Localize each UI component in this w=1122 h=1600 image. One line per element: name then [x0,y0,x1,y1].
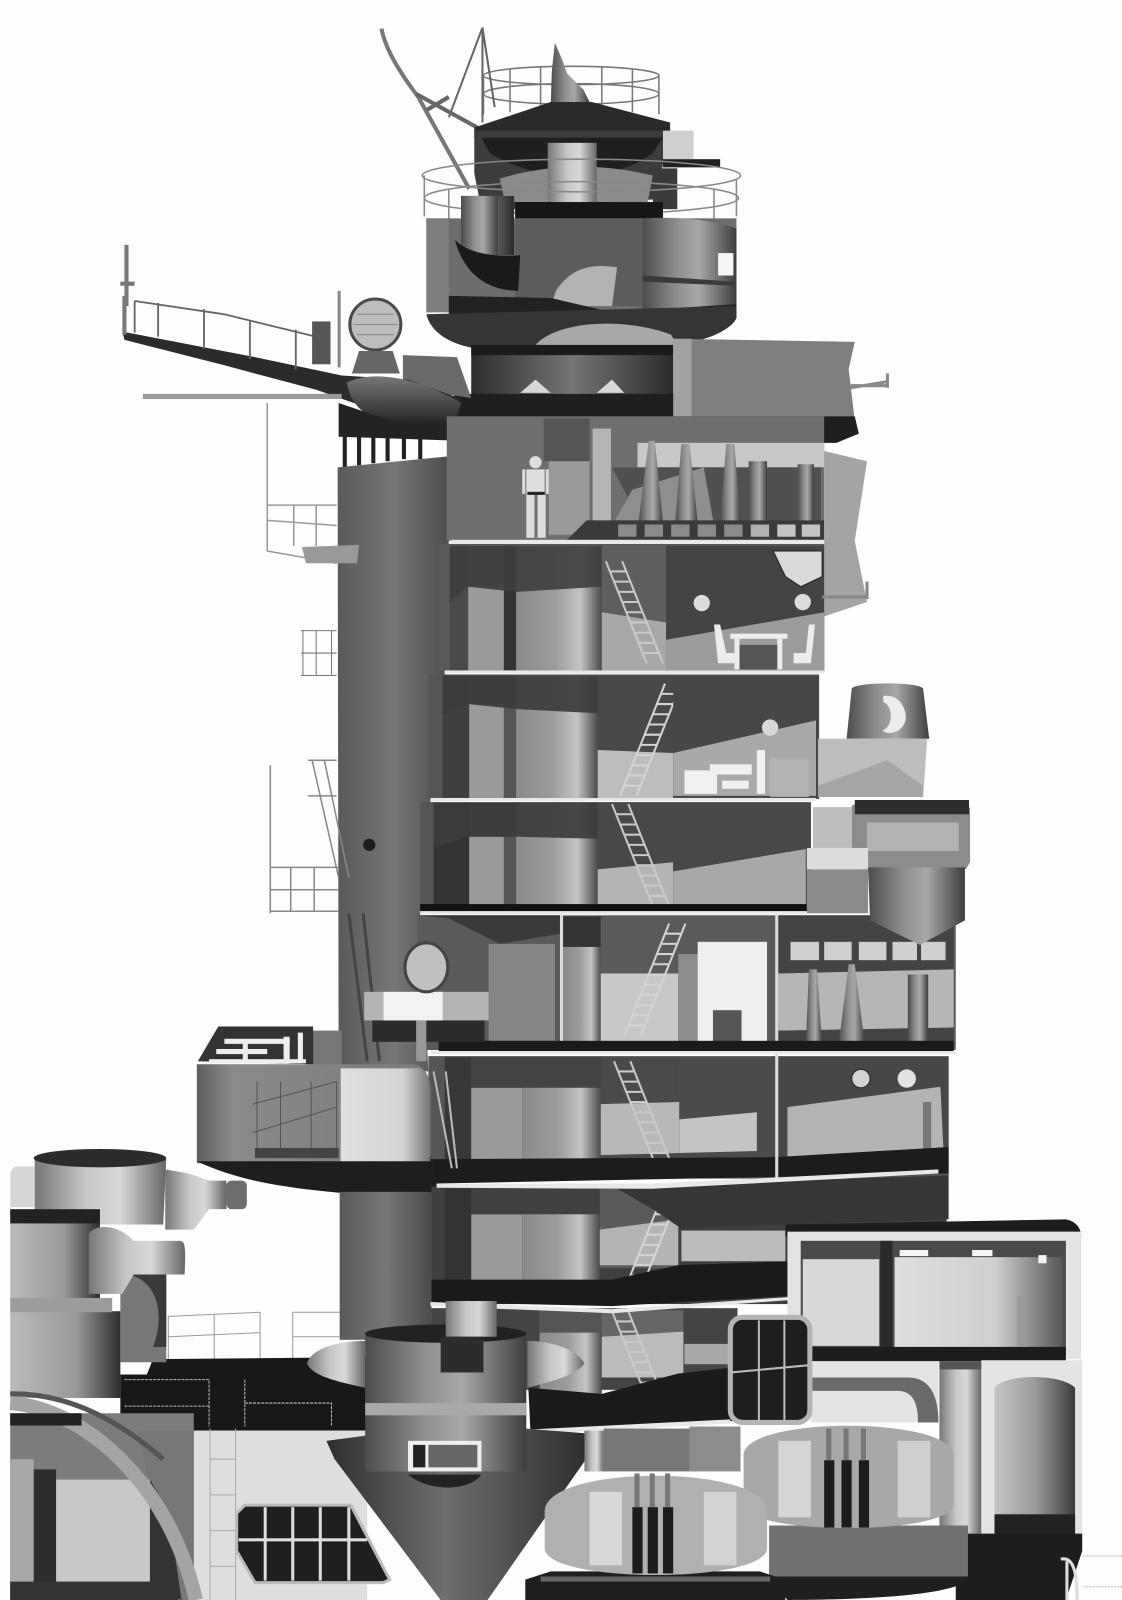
balcony wall [197,1064,430,1163]
central turret with cone [307,1301,590,1600]
wing supports [345,437,420,467]
white deck line group [420,540,957,1441]
rear side right pod [165,1169,226,1230]
hanging rail [267,403,337,563]
rear deck and rails at left [120,1312,367,1431]
searchlight [350,299,401,373]
light fittings [900,1250,1047,1263]
stair well [602,546,666,670]
searchlight [405,943,448,992]
arch band [10,1403,196,1600]
arch backing [10,1413,194,1600]
right room [778,915,954,1048]
upper cabin bowl [474,131,670,209]
box underside [454,394,859,443]
rear gun house [744,1426,968,1600]
tall side column [270,456,451,1071]
underside of deck above [612,1176,949,1229]
left pipes [450,546,468,670]
dotted ring [365,1403,526,1415]
dark column [34,1469,56,1600]
right compartment box [673,339,855,420]
tower neck [471,347,673,396]
bowl base [426,306,736,349]
dome [545,1476,767,1575]
section: deck 2 [439,544,867,671]
upper back wall [306,1031,342,1065]
stair cylinder [598,803,673,908]
box below hood [818,739,927,797]
far wedge [824,451,867,616]
floor shadow [439,1041,954,1051]
lower central trunk [584,1427,741,1471]
front barbette top [10,1209,100,1223]
dark band [449,296,736,318]
top dark slab [785,1219,1081,1237]
dark collar [515,202,663,220]
roof spike [551,43,590,104]
stair [434,1071,457,1168]
white arm [811,1361,938,1422]
hull window grid [237,1505,390,1583]
balcony platform [197,1027,457,1194]
dome [744,1426,954,1528]
column bracket [302,545,359,563]
section: deck 6 [428,1054,949,1184]
lit panel [50,1480,150,1582]
underside [197,1161,439,1194]
stair cylinder [600,1189,678,1268]
white frame [787,1232,1081,1359]
wing instrument post [312,321,330,364]
front lower barrel [10,1311,120,1398]
windows [638,443,824,467]
wing underside [339,403,464,441]
side inclined ladder [270,760,349,913]
lit floor [666,612,824,670]
white hull wall [194,1431,367,1600]
floor truss [566,520,824,541]
dark crescent [455,240,520,291]
shadow plane [612,467,821,526]
right drum [643,218,736,312]
port box [408,1441,481,1471]
white doorway wall [698,942,767,1044]
light dome [536,324,678,347]
top shadow [443,676,598,714]
balcony railing [253,1082,337,1153]
pedestals [639,441,814,523]
vertical pillar [939,1363,981,1534]
pump stand [923,1102,931,1163]
ladder [620,684,681,796]
lower column ladder [349,913,379,1061]
director tube [461,196,514,255]
window strip [790,942,946,960]
horizontal yard [143,394,342,399]
floor shadow [430,1147,949,1184]
top hatch [446,1301,497,1337]
wall [447,416,824,541]
table and chairs [714,624,815,669]
dark arch band [811,1378,938,1422]
sofa furniture [684,750,765,794]
front barbette [10,1223,100,1300]
base [956,1534,1082,1600]
room shadow [666,546,824,670]
standing pump [1017,1296,1026,1347]
hood [847,683,929,739]
room [673,803,811,908]
middle wall [426,218,736,312]
rear barbette [35,1159,166,1224]
section: deck 7 [431,1176,949,1306]
right room [778,1057,949,1169]
turret body [365,1333,526,1471]
wing railing [135,301,316,369]
deck shadow [431,1261,790,1306]
grid hatch [730,1317,810,1422]
searchlight platform [364,992,489,1020]
ladder [614,1061,671,1163]
floor [801,1347,1066,1361]
roof [474,102,670,138]
lower column [340,1192,431,1340]
wing walkway [122,332,459,420]
lower left arched structure [10,1394,390,1600]
wedge [138,1431,194,1600]
cone [326,1423,590,1600]
right bracket [851,373,887,388]
under platform shadow [372,1019,484,1042]
drum collar [852,801,970,869]
shells [632,1507,673,1573]
steps [813,807,852,848]
ladder [622,1184,683,1296]
lit wall [341,1068,429,1163]
right side: funnel drum and blocks [807,683,970,945]
wing antenna [120,245,135,335]
edge dotted lines [1083,1556,1122,1587]
top lookout: rails, mast and roof [381,28,741,219]
central instrument pillar [548,143,597,206]
base ring [525,1571,785,1600]
front gun house [525,1473,785,1600]
lower right: compartment frame [785,1219,1122,1600]
lower bowl and bridge wing [120,245,887,563]
right cylinder [994,1377,1075,1537]
dark deck [120,1357,367,1431]
right white column [981,1360,1082,1539]
section: deck 1 officers level [447,416,867,616]
side bulges [307,1341,365,1388]
control level drum [426,196,736,349]
drum body with cone [868,867,965,945]
ports [694,595,710,611]
ladder [624,923,685,1036]
top dark lattice [198,1027,313,1064]
ladder [606,561,663,663]
section: deck 5 with bulkheads [364,913,956,1061]
front side pod [89,1227,185,1294]
top shadow [450,546,602,602]
mast struts [381,28,495,189]
ladder [612,804,669,906]
stair well [598,676,673,798]
section: deck 8 [431,1308,811,1431]
room [673,676,819,798]
top shadow [471,1057,601,1088]
scale band [10,1298,112,1312]
section: deck 3 [428,674,819,799]
port hole [363,839,375,851]
figure [522,456,549,538]
stair cylinder [601,1057,679,1159]
upper railing [483,66,659,114]
left turret tops [10,1149,247,1398]
vertical ladder [210,1429,236,1600]
rear column [120,1274,166,1362]
dark deck [528,1367,811,1431]
cabin instrument [773,551,822,587]
room [801,1241,1066,1353]
rails [168,1312,340,1362]
upper side rail [301,631,337,676]
base drum [769,1526,968,1577]
outer bracket [822,582,867,599]
section: deck 4 [420,802,811,911]
rear side left pod [10,1166,35,1207]
shells [824,1460,869,1528]
stair well [601,916,775,1047]
ladder [612,1311,669,1413]
top shadow [434,803,598,847]
instruments [806,964,928,1046]
room lit wall [679,1057,775,1164]
wing rear bulk [403,355,471,398]
bulkheads [560,913,778,1051]
central trunk [516,546,602,670]
gallery railing [422,159,741,219]
